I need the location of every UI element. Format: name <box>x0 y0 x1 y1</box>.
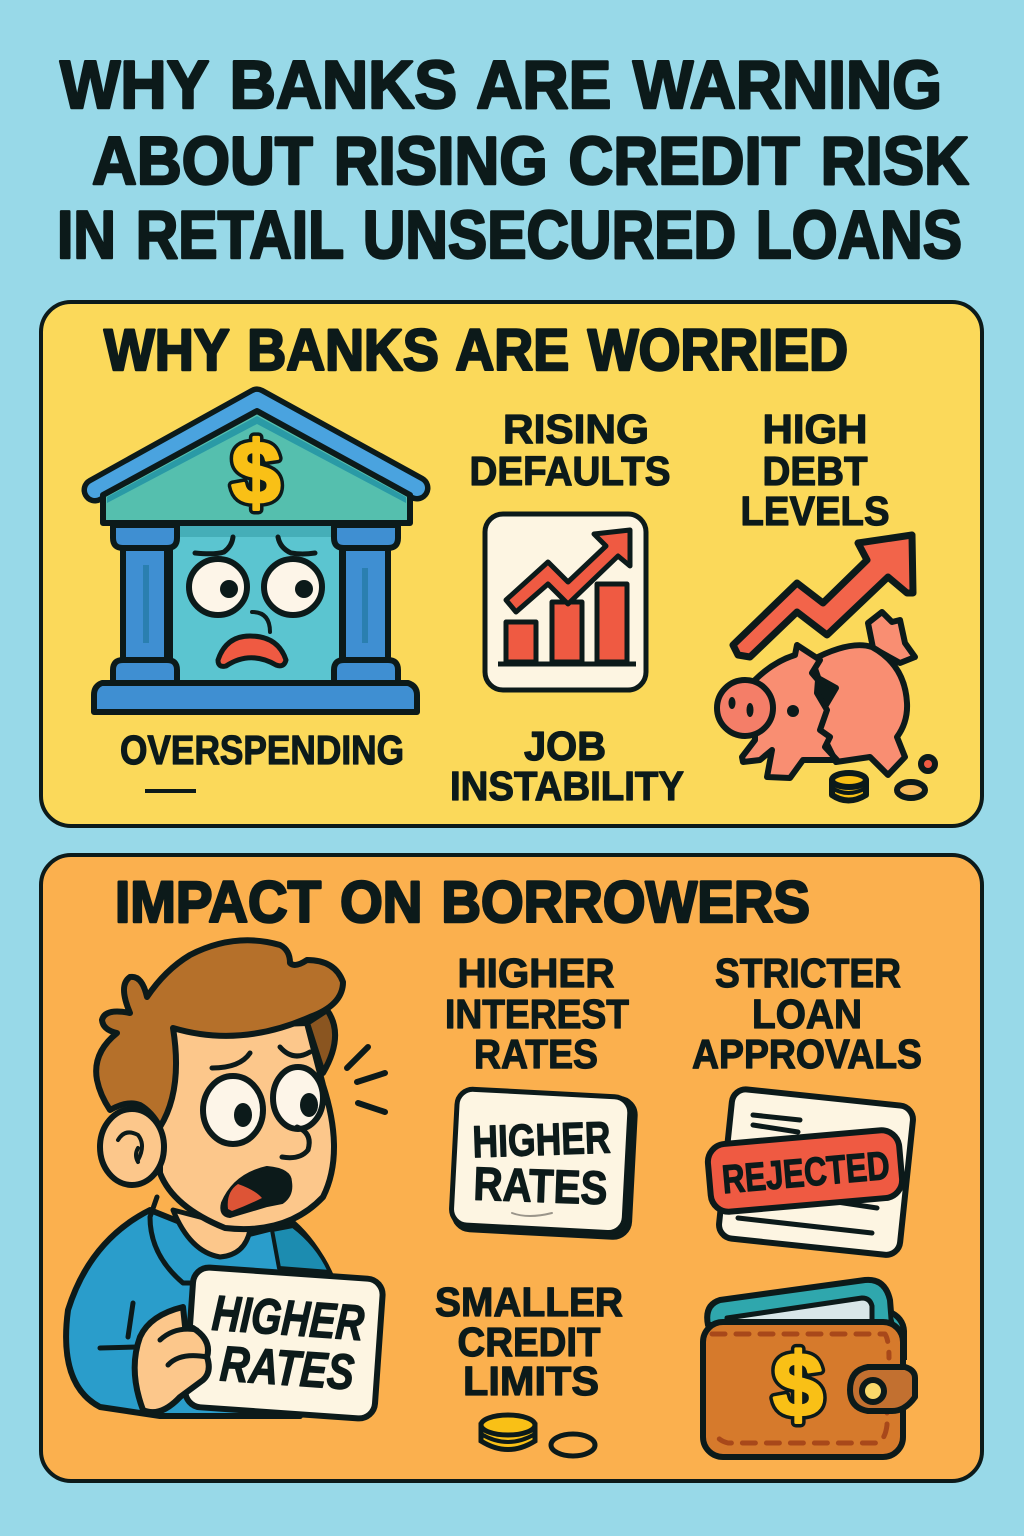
title: WHY BANKS ARE WARNING <box>60 47 942 123</box>
label: job instability <box>450 723 684 809</box>
icon: red arrow <box>733 535 913 657</box>
label: stricter loan approvals: APPROVALS <box>692 1031 922 1077</box>
label: stricter loan approvals: STRICTER <box>715 950 901 996</box>
sign: higher rates held by borrower <box>135 1267 384 1419</box>
label: high debt levels: DEBT <box>762 448 868 494</box>
label: higher interest rates: HIGHER <box>458 950 614 996</box>
label: smaller credit limits: SMALLER <box>435 1279 623 1325</box>
label: smaller credit limits <box>435 1279 623 1404</box>
label: rising defaults <box>470 406 670 494</box>
icon: higher rates card: RATES <box>473 1157 608 1214</box>
icon: dollar sign on bank: $ <box>232 423 280 522</box>
icon: dollar on wallet: $ <box>773 1336 823 1436</box>
icon: rejected document <box>706 1088 914 1256</box>
label: higher interest rates: RATES <box>474 1031 598 1077</box>
panel: impact on borrowers <box>41 855 982 1481</box>
dash under overspending <box>145 789 196 793</box>
label: smaller credit limits: CREDIT <box>458 1319 600 1365</box>
label: rising defaults: DEFAULTS <box>470 448 670 494</box>
label: smaller credit limits: LIMITS <box>463 1358 599 1404</box>
icon: wallet <box>703 1280 915 1457</box>
label: higher interest rates: INTEREST <box>445 991 629 1037</box>
sign: higher rates held by borrower: HIGHER <box>210 1285 366 1351</box>
label: higher interest rates <box>445 950 629 1077</box>
icon: higher rates card <box>451 1088 635 1238</box>
heading: why banks are worried: WHY BANKS ARE WORRIED <box>104 318 848 383</box>
title <box>57 47 969 273</box>
label: rising defaults: RISING <box>503 406 649 452</box>
label: job instability: JOB <box>524 723 606 769</box>
heading: impact on borrowers: IMPACT ON BORROWERS <box>115 870 810 935</box>
icon: higher rates card: HIGHER <box>472 1112 611 1167</box>
panel: why banks are worried <box>41 302 982 826</box>
icon: coins <box>481 1415 595 1456</box>
label: stricter loan approvals <box>692 950 922 1077</box>
illustration: worried borrower <box>66 940 385 1416</box>
label: stricter loan approvals: LOAN <box>752 991 862 1037</box>
label: high debt levels: LEVELS <box>740 488 890 534</box>
label: high debt levels: HIGH <box>762 406 868 452</box>
icon: dollar sign on bank: $ <box>232 423 280 522</box>
icon: broken piggy bank <box>717 612 935 800</box>
icon: rising chart <box>485 514 646 690</box>
icon: dollar on wallet: $ <box>773 1336 823 1436</box>
label: overspending: OVERSPENDING <box>120 727 404 773</box>
icon: worried bank <box>94 400 417 712</box>
label: job instability: INSTABILITY <box>450 763 684 809</box>
icon: rejected document: REJECTED <box>720 1144 891 1202</box>
sign: higher rates held by borrower: RATES <box>218 1335 356 1401</box>
title: ABOUT RISING CREDIT RISK <box>92 123 969 199</box>
label: high debt levels <box>740 406 890 534</box>
